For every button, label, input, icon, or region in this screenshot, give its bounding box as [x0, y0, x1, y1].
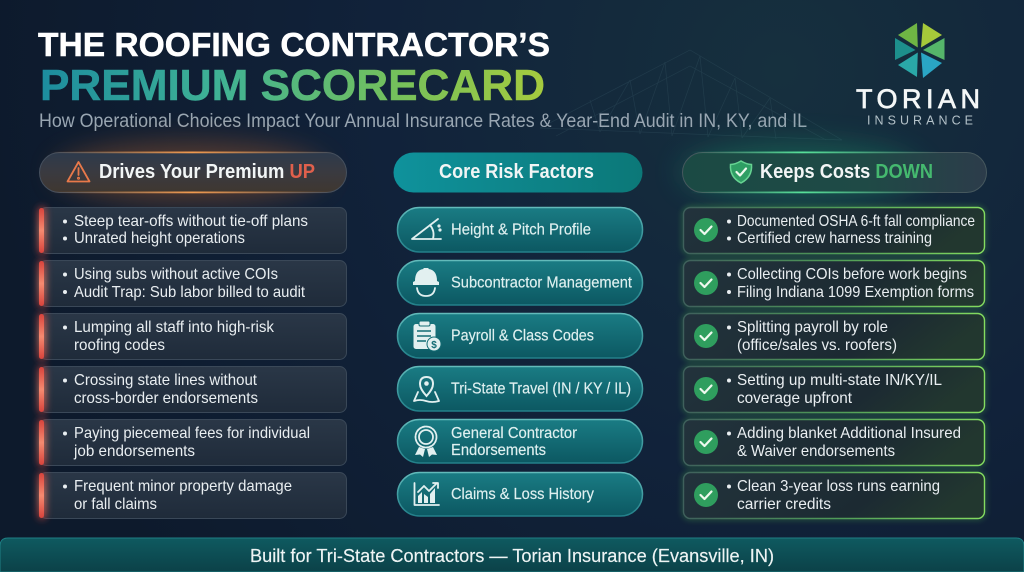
- card: multi-state coverage: [684, 366, 984, 412]
- card: splitting payroll: Splitting payroll by role: [737, 319, 888, 336]
- card: blanket endorsements: Adding blanket Additional Insured: [737, 425, 961, 442]
- title: [38, 26, 550, 110]
- icon: hexagon mark: [895, 23, 944, 78]
- logo wordmark: TORIAN: [856, 84, 980, 114]
- header label: Keeps Costs DOWN: [760, 161, 933, 183]
- pill: tri-state travel: [398, 366, 642, 411]
- pill: tri-state travel: Tri-State Travel (IN / KY / IL): [451, 380, 631, 398]
- panel: core risk factors: [398, 208, 642, 516]
- panel: cost reducers: [684, 208, 984, 518]
- card: crossing state lines: [39, 366, 346, 413]
- pill: height and pitch: [398, 208, 642, 252]
- icon: rising chart: [414, 483, 439, 505]
- card: subs without COIs: Using subs without active COIs: [74, 266, 278, 283]
- icon: shield: [730, 161, 752, 183]
- pill: claims and loss history: Claims & Loss History: [451, 486, 594, 503]
- card: clean loss runs: carrier credits: [737, 496, 831, 513]
- header label: Drives Your Premium UP: [99, 161, 315, 183]
- card: frequent claims: [39, 472, 346, 519]
- subtitle: How Operational Choices Impact Your Annual Insurance Rates & Year-End Audit in IN, KY, and IL: [39, 110, 807, 132]
- card: clean loss runs: Clean 3-year loss runs earning: [737, 478, 940, 495]
- icon: warning triangle: [68, 162, 90, 182]
- card: piecemeal fees: job endorsements: [73, 443, 195, 460]
- card: frequent claims: Frequent minor property damage: [74, 478, 292, 495]
- pill: general contractor endorsements: [398, 420, 642, 463]
- card: collecting COIs: [684, 260, 984, 306]
- pill: subcontractor management: Subcontractor Management: [451, 274, 633, 292]
- card: splitting payroll: (office/sales vs. roofers): [737, 337, 897, 354]
- footer text: Built for Tri-State Contractors — Torian Insurance (Evansville, IN): [250, 546, 774, 566]
- footer banner: [0, 538, 1024, 572]
- icon: hard hat: [413, 268, 439, 296]
- card: OSHA compliance: [684, 208, 984, 254]
- card: piecemeal fees: Paying piecemeal fees for individual: [74, 425, 310, 442]
- pill: claims and loss history: [398, 472, 642, 516]
- pill: payroll and class codes: Payroll & Class Codes: [451, 328, 594, 344]
- card: blanket endorsements: [684, 420, 984, 466]
- card: piecemeal fees: [39, 419, 346, 466]
- icon: roof pitch angle: [412, 219, 441, 239]
- card: splitting payroll: [684, 314, 984, 360]
- card: OSHA compliance: Certified crew harness training: [737, 230, 932, 247]
- card: steep tear-offs: Unrated height operations: [74, 230, 245, 247]
- logo subline: INSURANCE: [867, 114, 973, 128]
- pill: general contractor endorsements: Endorsements: [451, 442, 546, 459]
- pill: height and pitch: Height & Pitch Profile: [451, 222, 591, 238]
- card: lumping staff: Lumping all staff into high-risk: [74, 319, 274, 336]
- header: core risk factors: [394, 152, 642, 192]
- title: THE ROOFING CONTRACTOR’S: [38, 26, 550, 63]
- card: subs without COIs: [39, 260, 346, 307]
- card: multi-state coverage: coverage upfront: [737, 390, 853, 407]
- card: multi-state coverage: Setting up multi-state IN/KY/IL: [737, 372, 942, 389]
- card: collecting COIs: Filing Indiana 1099 Exemption forms: [737, 284, 974, 301]
- header: keeps costs down: [680, 142, 986, 202]
- pill: subcontractor management: [398, 260, 642, 305]
- card: blanket endorsements: & Waiver endorsements: [737, 443, 895, 460]
- card: crossing state lines: Crossing state lines without: [74, 372, 258, 389]
- icon: map pin: [414, 377, 439, 402]
- header label: Core Risk Factors: [439, 161, 594, 183]
- card: frequent claims: or fall claims: [74, 496, 157, 513]
- card: clean loss runs: [684, 472, 984, 518]
- title: PREMIUM SCORECARD: [40, 61, 545, 110]
- icon: award ribbon: [415, 426, 437, 457]
- card: collecting COIs: Collecting COIs before work begins: [737, 266, 967, 283]
- header: drives your premium up: [40, 142, 346, 202]
- card: steep tear-offs: Steep tear-offs without tie-off plans: [74, 213, 308, 230]
- card: lumping staff: [39, 313, 346, 360]
- pill: payroll and class codes: [398, 314, 642, 358]
- card: crossing state lines: cross-border endorsements: [74, 390, 258, 407]
- card: OSHA compliance: Documented OSHA 6-ft fall compliance: [737, 213, 975, 230]
- logo: Torian Insurance: [856, 23, 980, 128]
- pill: general contractor endorsements: General Contractor: [451, 425, 577, 442]
- card: subs without COIs: Audit Trap: Sub labor billed to audit: [74, 284, 306, 301]
- card: lumping staff: roofing codes: [74, 337, 165, 354]
- panel: premium drivers: [39, 207, 346, 519]
- icon: clipboard with dollar: $: [431, 340, 437, 351]
- card: steep tear-offs: [39, 207, 346, 254]
- faint roof truss backdrop: [540, 50, 842, 140]
- icon: clipboard with dollar: [414, 321, 441, 351]
